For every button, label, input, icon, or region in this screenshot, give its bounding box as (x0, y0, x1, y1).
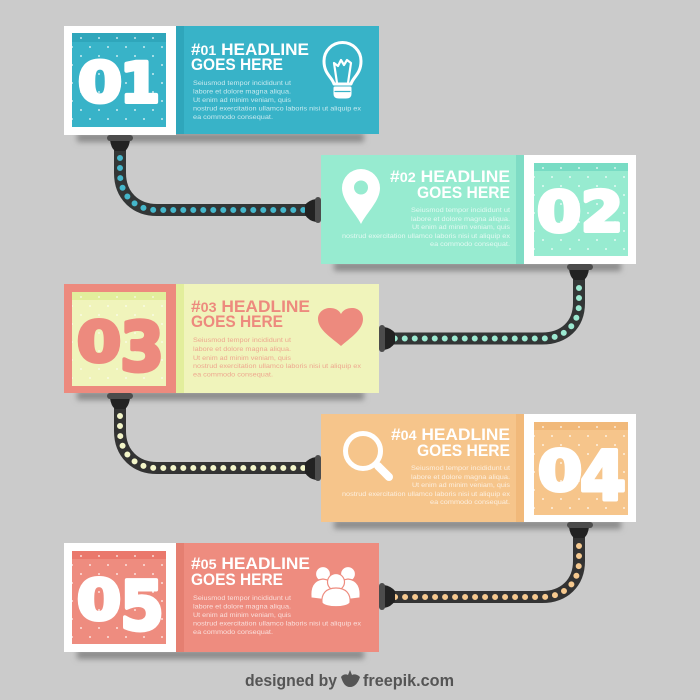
body text 02: ea commodo consequat. (430, 241, 510, 248)
body text 03: labore et dolore magna aliqua. (193, 346, 291, 353)
body text 03: Ut enim ad minim veniam, quis (193, 355, 292, 362)
body text 02: Seiusmod tempor incididunt ut (411, 207, 510, 214)
icon: freepik mascot (341, 670, 360, 687)
number tile 02: 0 (537, 180, 581, 244)
body text 04: nostrud exercitation ullamco laboris nisi ut aliquip ex (342, 491, 511, 498)
number tile 02: 2 (581, 180, 623, 244)
headline 02 (390, 167, 510, 202)
icon: group of people (311, 566, 360, 607)
body text 03 (193, 337, 362, 378)
headline 05 (191, 554, 310, 589)
headline 04 (391, 425, 510, 460)
connector: step 2 to step 3 (379, 264, 593, 352)
number tile 01: 1 (120, 51, 160, 115)
body text 02: Ut enim ad minim veniam, quis (412, 224, 511, 231)
body text 04 (342, 465, 511, 506)
body text 03: Seiusmod tempor incididunt ut (193, 337, 291, 344)
connector: step 4 to step 5 (379, 522, 593, 610)
headline 01: #01 HEADLINE (191, 40, 309, 59)
headline 02: #02 HEADLINE (390, 167, 510, 186)
body text 04: ea commodo consequat. (430, 499, 510, 506)
footer credit: designed by freepik.com: freepik.com (363, 671, 454, 690)
footer credit: designed by freepik.com (245, 670, 454, 690)
panel: step 2 (321, 155, 636, 271)
body text 05: Seiusmod tempor incididunt ut (193, 595, 291, 602)
icon: heart (318, 308, 363, 346)
headline 01: GOES HERE (191, 55, 283, 74)
headline 04: GOES HERE (417, 441, 510, 460)
panel: step 1 (64, 26, 379, 142)
body text 05: nostrud exercitation ullamco laboris nisi ut aliquip ex (193, 620, 362, 628)
body text 01: ea commodo consequat. (193, 114, 273, 121)
body text 05: ea commodo consequat. (193, 629, 273, 636)
headline 03: GOES HERE (191, 312, 283, 331)
number tile 03: 3 (120, 308, 164, 388)
body text 05: Ut enim ad minim veniam, quis (193, 612, 292, 619)
number tile 03 (72, 292, 166, 388)
body text 02: labore et dolore magna aliqua. (411, 216, 510, 223)
headline 05: GOES HERE (191, 570, 283, 589)
body text 02: nostrud exercitation ullamco laboris nisi ut aliquip ex (342, 233, 511, 240)
number tile 05: 5 (120, 568, 164, 646)
headline 01 (191, 40, 309, 74)
number tile 02 (534, 163, 628, 256)
panel: step 4 (321, 414, 636, 529)
number tile 01 (72, 33, 166, 127)
body text 05 (193, 595, 362, 636)
panel: step 3 (64, 284, 379, 400)
headline 04: #04 HEADLINE (391, 425, 510, 444)
number tile 05 (72, 551, 166, 646)
headline 05: #05 HEADLINE (191, 554, 310, 573)
body text 04: Seiusmod tempor incididunt ut (411, 465, 510, 472)
body text 01: nostrud exercitation ullamco laboris nisi ut aliquip ex (193, 106, 362, 112)
icon: magnifying glass (346, 434, 389, 477)
number tile 04: 4 (580, 438, 626, 516)
body text 01: Ut enim ad minim veniam, quis (193, 97, 292, 104)
number tile 04: 0 (538, 439, 582, 503)
body text 01: labore et dolore magna aliqua. (193, 88, 291, 96)
body text 05: labore et dolore magna aliqua. (193, 604, 291, 610)
icon: location pin (342, 169, 380, 224)
number tile 05: 0 (77, 568, 121, 632)
headline 03 (191, 297, 310, 331)
panel: step 5 (64, 543, 379, 659)
body text 04: Ut enim ad minim veniam, quis (412, 482, 511, 489)
headline 02: GOES HERE (417, 183, 510, 202)
footer credit: designed by freepik.com: designed by (245, 671, 338, 690)
connector: step 3 to step 4 (107, 393, 321, 481)
number tile 03: 0 (77, 310, 121, 374)
icon: light bulb (324, 43, 361, 97)
headline 03: #03 HEADLINE (191, 297, 310, 316)
body text 03: nostrud exercitation ullamco laboris nisi ut aliquip ex (193, 363, 362, 370)
number tile 01: 0 (78, 50, 122, 114)
connector: step 1 to step 2 (107, 135, 321, 223)
number tile 04 (534, 422, 628, 516)
body text 03: ea commodo consequat. (193, 372, 273, 378)
body text 01: Seiusmod tempor incididunt ut (193, 80, 291, 87)
body text 04: labore et dolore magna aliqua. (411, 474, 510, 481)
body text 02 (342, 207, 511, 248)
body text 01 (193, 80, 362, 121)
